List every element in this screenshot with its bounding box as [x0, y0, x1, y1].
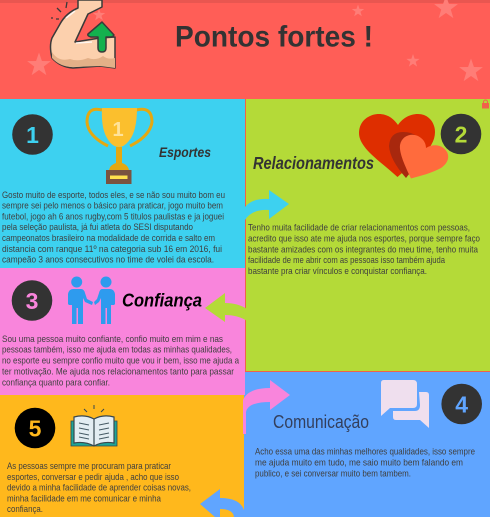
text: Relacionamentos: facilidade de me abrir com as pessoas isso também ajuda [248, 255, 446, 265]
text: Esportes: campeão 3 anos consecutivos no time de volei da escola. [2, 254, 214, 264]
icon: lock [482, 100, 489, 108]
text: Esportes [2, 190, 225, 264]
number 1 [12, 114, 53, 155]
number 3: 3 [26, 288, 38, 314]
text: Esportes: futebol, jogo ah 6 anos rugby,com 5 titulos paulistas e ja joguei [2, 212, 224, 222]
text: Esportes: campeonatos brasileiro na modalidade de corrida e salto em [2, 233, 215, 243]
panel: Relacionamentos [245, 99, 490, 372]
text: Confiança: confiança quanto para confiar. [2, 378, 110, 388]
text: item 5: confiança. [7, 504, 43, 514]
text: item 5: devido a minha facilidade de aprender coisas novas, [7, 482, 191, 492]
text: Confiança: ter motivação. Me ajuda nos relacionamentos tanto para passar [2, 366, 234, 376]
text: item 5: esportes, conversar e pedir ajuda , acho que isso [7, 472, 179, 482]
text: Esportes: Gosto muito de esporte, todos eles, e se não sou muito bom eu [2, 190, 225, 200]
icon: two people holding hands [68, 276, 115, 324]
icon: chat bubbles [381, 380, 429, 428]
text: Comunicação: publico, e sei conversar muito bem tambem. [255, 468, 411, 478]
heading: Comunicação: Comunicação [273, 412, 369, 432]
arrow: green, Relacionamentos to Confiança [205, 293, 247, 322]
text: Confiança: no esporte eu sempre confio muito que vou ir bem, isso me ajuda a [2, 356, 240, 366]
number 5: 5 [29, 416, 42, 442]
text: Confiança: Sou uma pessoa muito confiante, confio muito em mim e nas [2, 334, 223, 344]
title: Pontos fortes ! [175, 20, 373, 54]
arrow: cyan, Esportes to Relacionamentos [245, 190, 289, 220]
number 1: 1 [26, 122, 39, 148]
panel: item 5 [0, 395, 244, 517]
number 3 [12, 280, 52, 321]
icon: open book [71, 405, 117, 446]
text: Esportes: pela seleção paulista, já fui atleta do SESI disputando [2, 222, 193, 232]
number 4 [441, 384, 482, 424]
text: Relacionamentos [248, 222, 480, 276]
heading: Relacionamentos: Relacionamentos [253, 153, 374, 173]
text: item 5: minha facilidade em me comunicar e minha [7, 494, 162, 504]
text: Esportes: sempre sei pelo menos o básico para praticar, jogo muito bem [2, 200, 223, 210]
number 4: 4 [455, 392, 468, 418]
text: Esportes: distancia com ranque 11º na categoria sub 16 em 2016, fui [2, 244, 222, 254]
icon: hearts [359, 114, 448, 178]
panel: Esportes [0, 99, 245, 268]
text: Relacionamentos: bastante pra criar vínculos e conquistar confiança. [248, 266, 427, 276]
icon: flexed arm with green arrow [50, 0, 115, 68]
text: Confiança [2, 334, 240, 388]
panel: Comunicação [243, 371, 490, 517]
icon: trophy [87, 108, 152, 184]
number 5 [15, 408, 55, 448]
text: Comunicação [255, 446, 475, 478]
panel: header [0, 0, 490, 99]
panel: Confiança [0, 268, 245, 395]
arrow: pink, Confiança to Comunicação [243, 380, 290, 434]
text: Comunicação: me ajuda muito em tudo, me saio muito bem falando em [255, 458, 463, 468]
number 2: 2 [455, 122, 467, 148]
arrow: blue, Comunicação to item 5 [200, 489, 245, 517]
heading: Esportes: Esportes [159, 144, 211, 160]
text: Confiança: pessoas também, isso me ajuda em todas as minhas qualidades, [2, 344, 232, 354]
number 2 [441, 114, 481, 154]
icon: trophy: 1 [112, 119, 124, 141]
text: item 5 [7, 461, 191, 514]
text: item 5: As pessoas sempre me procuram para praticar [7, 461, 171, 471]
heading: Confiança: Confiança [122, 290, 202, 310]
